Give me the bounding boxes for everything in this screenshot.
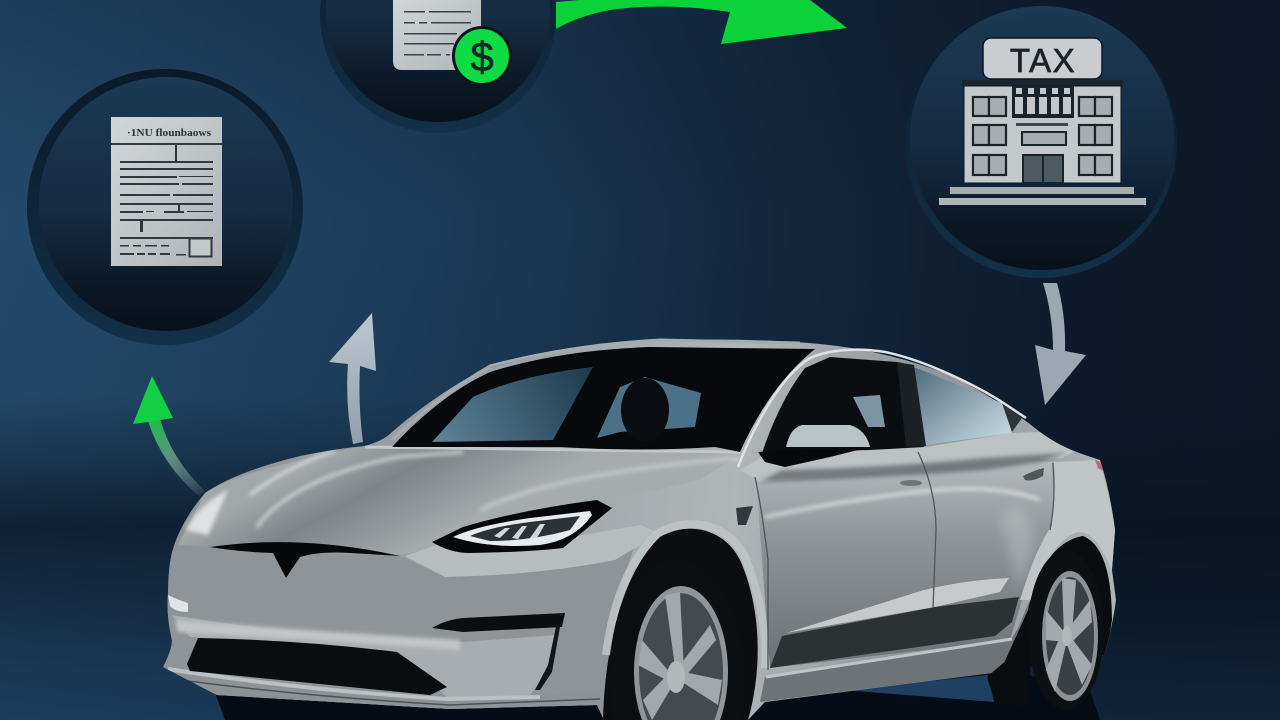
- windscreen pane: [432, 367, 593, 442]
- tail light: [1095, 460, 1104, 472]
- B pillar: [897, 362, 926, 447]
- shoulder panel: [740, 432, 1075, 482]
- car body: [163, 340, 1116, 720]
- arrow: grey up arrow: [329, 313, 376, 444]
- circle: tax office building: [905, 6, 1177, 278]
- fender highlight: [606, 524, 765, 668]
- car floor shadow: [215, 668, 1100, 720]
- door seams: [755, 452, 1054, 670]
- car: [163, 340, 1116, 720]
- rear quarter: [1020, 460, 1116, 600]
- circle: invoice with dollar badge: [320, 0, 556, 133]
- hood: [178, 446, 740, 555]
- rear wheel: [987, 550, 1104, 710]
- icon: tax form: ·1NU flounbaows: [127, 128, 211, 139]
- icon: invoice: [393, 0, 481, 70]
- icon: dollar badge: $: [470, 33, 494, 80]
- arrow: green up arrow: [133, 376, 205, 496]
- headrest: [621, 378, 669, 442]
- roof edge: [392, 340, 800, 440]
- fog light strip: [432, 613, 565, 632]
- dark sill: [770, 597, 1019, 668]
- front wheel: [609, 559, 745, 720]
- front reflector: [168, 595, 188, 612]
- circle: tax form document: [27, 69, 303, 345]
- sign: TAX: TAX: [1010, 42, 1076, 79]
- door panels: [756, 452, 1052, 668]
- front fascia: [163, 525, 660, 720]
- arrow: grey down arrow: [1035, 283, 1086, 405]
- icon: dollar badge: [452, 26, 512, 86]
- door handles and charge port: [736, 468, 1044, 525]
- windscreen and roof glass: [392, 347, 815, 452]
- lower grille: [187, 638, 447, 695]
- arrow: green curved arrow top: [556, 0, 847, 44]
- door highlight: [765, 489, 1040, 517]
- sign: TAX: [983, 38, 1102, 79]
- icon: tax form: [111, 117, 222, 266]
- headlight: [432, 500, 612, 553]
- sill highlight: [786, 578, 1009, 633]
- rear side window: [914, 367, 1012, 445]
- rear wheel arch: [1000, 536, 1112, 672]
- side windows: [762, 357, 1022, 453]
- grille slit: [210, 542, 400, 578]
- front wheel arch: [603, 529, 758, 720]
- seat view pane: [597, 377, 701, 438]
- side mirror: [758, 425, 870, 467]
- roof chrome line: [738, 350, 1026, 467]
- icon: tax office: [939, 38, 1146, 205]
